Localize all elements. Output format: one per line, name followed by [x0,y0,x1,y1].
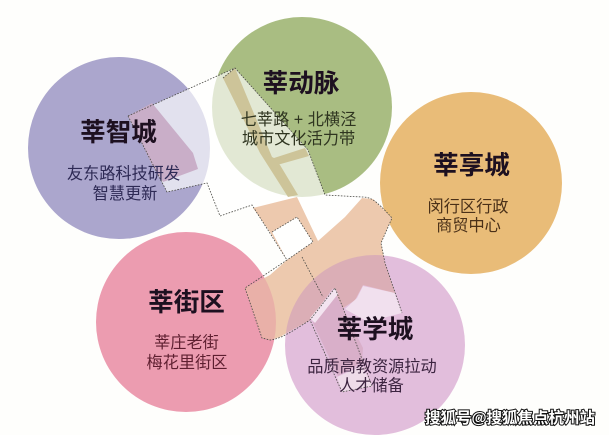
title: 莘享城: 莘享城 [433,150,510,180]
text: 莘街区 description: 梅花里街区 [147,354,227,372]
circle: 莘智城 [28,57,210,239]
text: 莘街区 description [147,334,227,372]
title: 莘街区: 莘街区 [148,288,225,317]
title: 莘学城: 莘学城 [337,314,414,344]
map: pale patch in lilac circle [345,286,402,322]
circle: 莘学城 [285,255,465,435]
map: tan green strip [223,68,298,197]
text: 莘学城 description: 人才储备 [339,377,404,395]
text: 莘智城 description: 智慧更新 [93,185,157,203]
map: dotted boundary [128,68,402,392]
circle: 莘动脉 [212,17,392,197]
text: 莘享城 description: 闵行区行政 [428,198,508,216]
text: 莘享城 description [428,198,508,235]
map: peach land block [245,197,395,340]
text: 莘智城 description [67,165,180,203]
map: mauve plot in purple circle [128,103,198,182]
text: 莘动脉 description [241,111,356,148]
map: tan cross bar [262,148,309,167]
title: 莘智城: 莘智城 [80,117,157,147]
map: mauve plot in lilac circle [313,293,363,376]
text: 莘动脉 description: 七莘路 + 北横泾 [241,111,356,129]
map: pale strip in lilac circle [310,288,338,323]
planning map overlay [128,68,402,392]
circle: 莘街区 [96,232,276,412]
text: 莘享城 description: 商贸中心 [436,217,501,235]
text: 莘学城 description [307,358,437,395]
map: peach over pink circle [245,278,276,340]
map: pale strip at bottom of lilac plot [337,366,372,392]
title: 莘动脉: 莘动脉 [263,69,340,98]
text: 莘动脉 description: 城市文化活力带 [242,130,355,148]
text: 莘智城 description: 友东路科技研发 [67,165,180,183]
text: 莘学城 description: 品质高教资源拉动 [307,358,437,376]
watermark: 搜狐号@搜狐焦点杭州站 [425,408,595,427]
circle: 莘享城 [380,92,562,274]
map: translucent white base [128,68,365,260]
map: peach over lilac circle [286,255,395,334]
text: 莘街区 description: 莘庄老街 [154,334,219,352]
